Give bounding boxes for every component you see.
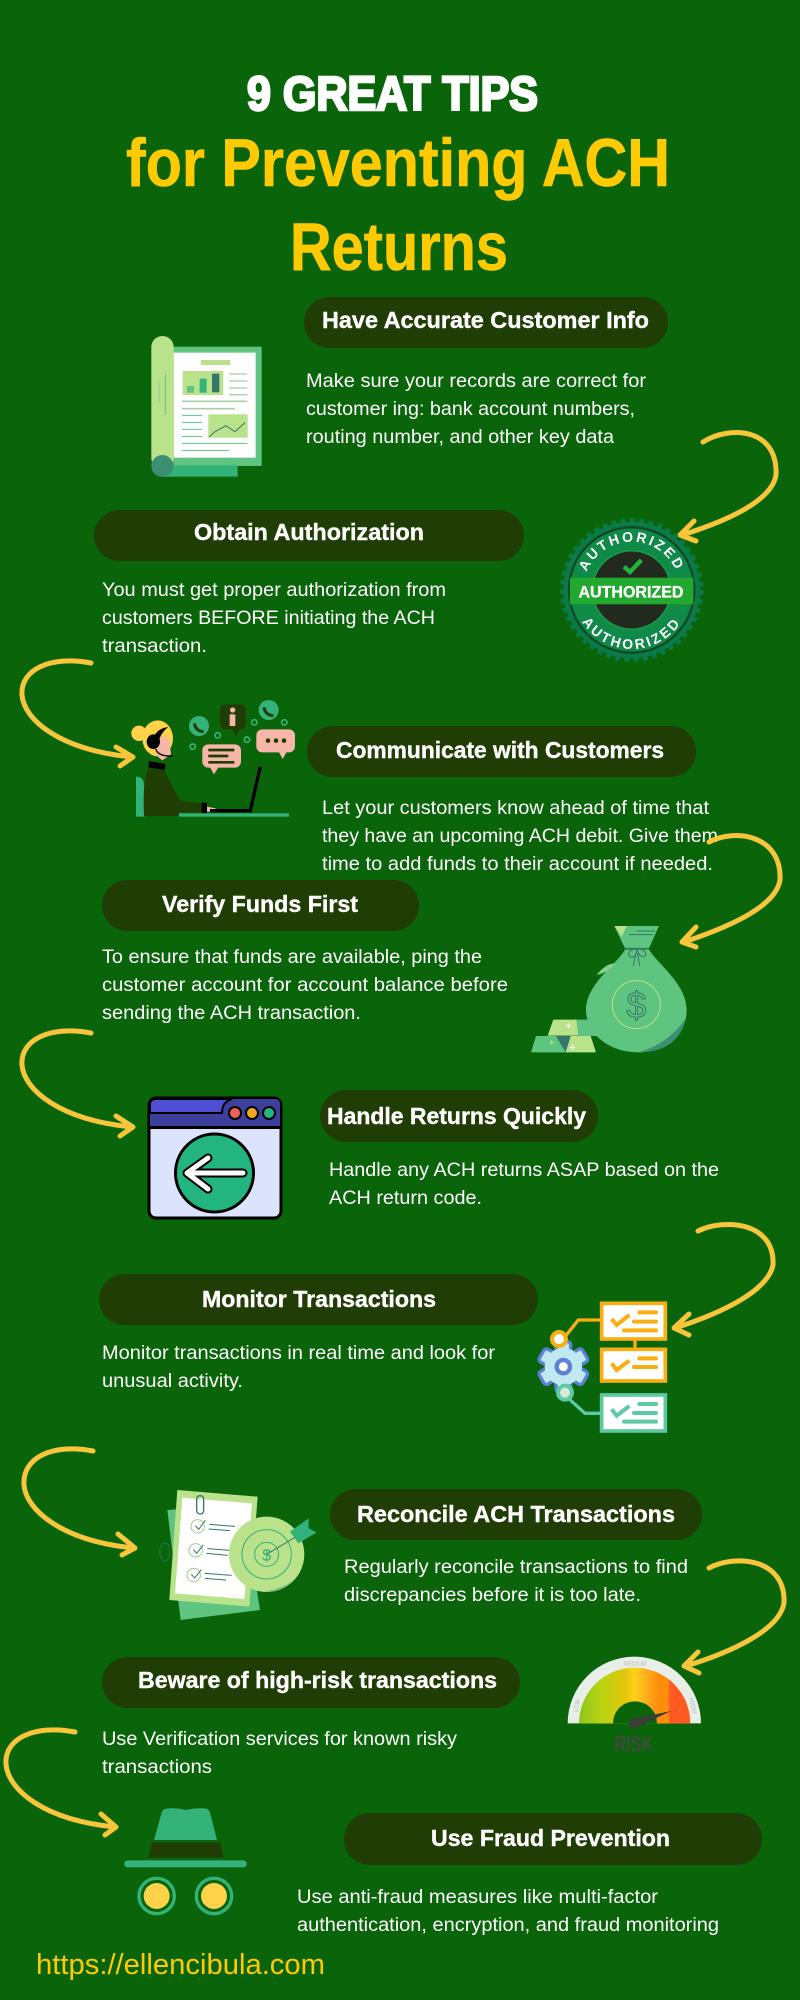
icon: checklist and target: $ bbox=[262, 1547, 271, 1564]
heading pill: Handle Returns Quickly bbox=[327, 1103, 586, 1129]
panel: tip 9 use fraud prevention bbox=[124, 1808, 762, 1936]
text block bbox=[102, 1728, 457, 1778]
text block: customer account for account balance before bbox=[102, 974, 508, 996]
panel: tip 7 reconcile transactions bbox=[160, 1489, 702, 1620]
text block: Use Verification services for known risky bbox=[102, 1728, 457, 1750]
title: 9 GREAT TIPS bbox=[247, 68, 538, 121]
heading pill: Beware of high-risk transactions bbox=[138, 1667, 497, 1693]
title: for Preventing ACH bbox=[126, 125, 670, 201]
arrow: tip 1 to tip 2 bbox=[680, 433, 776, 541]
arrow: tip 4 to tip 5 bbox=[22, 1031, 133, 1136]
website url: https://ellencibula.com bbox=[36, 1949, 325, 1981]
text block: customer ing: bank account numbers, bbox=[306, 398, 635, 420]
icon: authorized badge: AUTHORIZED bbox=[578, 583, 684, 601]
title: Returns bbox=[290, 209, 508, 285]
text block: routing number, and other key data bbox=[306, 426, 614, 448]
icon: authorized badge bbox=[560, 518, 704, 662]
icon: authorized badge: AUTHORIZED bbox=[580, 532, 682, 572]
heading pill bbox=[320, 1090, 598, 1142]
text block: transaction. bbox=[102, 635, 207, 657]
heading pill bbox=[304, 297, 668, 348]
text block bbox=[297, 1886, 719, 1936]
panel: tip 8 beware of high-risk transactions bbox=[102, 1657, 701, 1778]
heading pill bbox=[102, 880, 419, 931]
text block bbox=[102, 1342, 496, 1392]
icon: risk gauge: LOW bbox=[573, 1698, 582, 1713]
heading pill bbox=[307, 726, 696, 777]
heading pill bbox=[344, 1813, 762, 1865]
icon: checklist and target bbox=[160, 1490, 317, 1620]
text block: You must get proper authorization from bbox=[102, 579, 446, 601]
text block: customers BEFORE initiating the ACH bbox=[102, 607, 435, 629]
heading pill: Communicate with Customers bbox=[336, 737, 664, 763]
heading pill: Obtain Authorization bbox=[194, 519, 424, 545]
heading pill: Reconcile ACH Transactions bbox=[357, 1501, 675, 1527]
icon: browser window with back arrow bbox=[148, 1098, 282, 1218]
text block: Use anti-fraud measures like multi-factor bbox=[297, 1886, 659, 1908]
icon: incognito hat and glasses bbox=[124, 1808, 247, 1914]
arrow: tip 6 to tip 7 bbox=[24, 1449, 135, 1555]
panel: tip 6 monitor transactions bbox=[99, 1274, 665, 1431]
icon: report document bbox=[151, 336, 262, 477]
text block bbox=[329, 1159, 719, 1209]
icon: risk gauge: RISK bbox=[614, 1732, 653, 1757]
text block bbox=[344, 1556, 688, 1606]
text block: they have an upcoming ACH debit. Give them bbox=[322, 825, 718, 847]
heading pill bbox=[99, 1274, 538, 1325]
arrow: tip 8 to tip 9 bbox=[6, 1730, 116, 1835]
text block bbox=[322, 797, 718, 875]
text block: To ensure that funds are available, ping the bbox=[102, 946, 482, 968]
text block: transactions bbox=[102, 1756, 212, 1778]
arrow: tip 7 to tip 8 bbox=[684, 1561, 784, 1673]
icon: money bag and gold bars: $ bbox=[626, 984, 646, 1025]
text block: discrepancies before it is too late. bbox=[344, 1584, 641, 1606]
icon: authorized badge: AUTHORIZED bbox=[582, 618, 678, 650]
text block: authentication, encryption, and fraud monitoring bbox=[297, 1914, 719, 1936]
icon: money bag and gold bars bbox=[531, 926, 687, 1052]
icon: customer support agent bbox=[131, 700, 295, 817]
text block: ACH return code. bbox=[329, 1187, 482, 1209]
arrow: tip 3 to tip 4 bbox=[682, 836, 780, 947]
heading pill: Use Fraud Prevention bbox=[431, 1825, 670, 1851]
text block: Regularly reconcile transactions to find bbox=[344, 1556, 688, 1578]
heading pill: Have Accurate Customer Info bbox=[322, 307, 649, 333]
panel: tip 5 handle returns quickly bbox=[148, 1090, 719, 1218]
text block: sending the ACH transaction. bbox=[102, 1002, 361, 1024]
text block: unusual activity. bbox=[102, 1370, 243, 1392]
text block bbox=[306, 370, 647, 448]
arrow: tip 5 to tip 6 bbox=[674, 1224, 773, 1335]
panel: tip 4 verify funds first bbox=[102, 880, 687, 1052]
heading pill bbox=[102, 1657, 520, 1708]
text block bbox=[102, 946, 508, 1024]
text block: time to add funds to their account if needed. bbox=[322, 853, 713, 875]
panel: tip 1 accurate customer info bbox=[151, 297, 668, 477]
panel: tip 3 communicate with customers bbox=[131, 700, 718, 875]
text block bbox=[102, 579, 446, 657]
icon: risk gauge: MEDIUM bbox=[623, 1661, 647, 1668]
arrow: tip 2 to tip 3 bbox=[22, 661, 133, 766]
title bbox=[126, 68, 670, 285]
text block: Make sure your records are correct for bbox=[306, 370, 647, 392]
panel: tip 2 obtain authorization bbox=[94, 510, 704, 662]
heading pill: Verify Funds First bbox=[162, 891, 358, 917]
heading pill bbox=[94, 510, 524, 561]
heading pill bbox=[330, 1489, 702, 1540]
heading pill: Monitor Transactions bbox=[202, 1286, 436, 1312]
text block: Let your customers know ahead of time that bbox=[322, 797, 710, 819]
text block: Handle any ACH returns ASAP based on the bbox=[329, 1159, 719, 1181]
icon: risk gauge: HIGH bbox=[687, 1697, 697, 1714]
text block: Monitor transactions in real time and look for bbox=[102, 1342, 496, 1364]
icon: gear with checklists bbox=[538, 1303, 665, 1431]
icon: risk gauge bbox=[568, 1657, 701, 1757]
